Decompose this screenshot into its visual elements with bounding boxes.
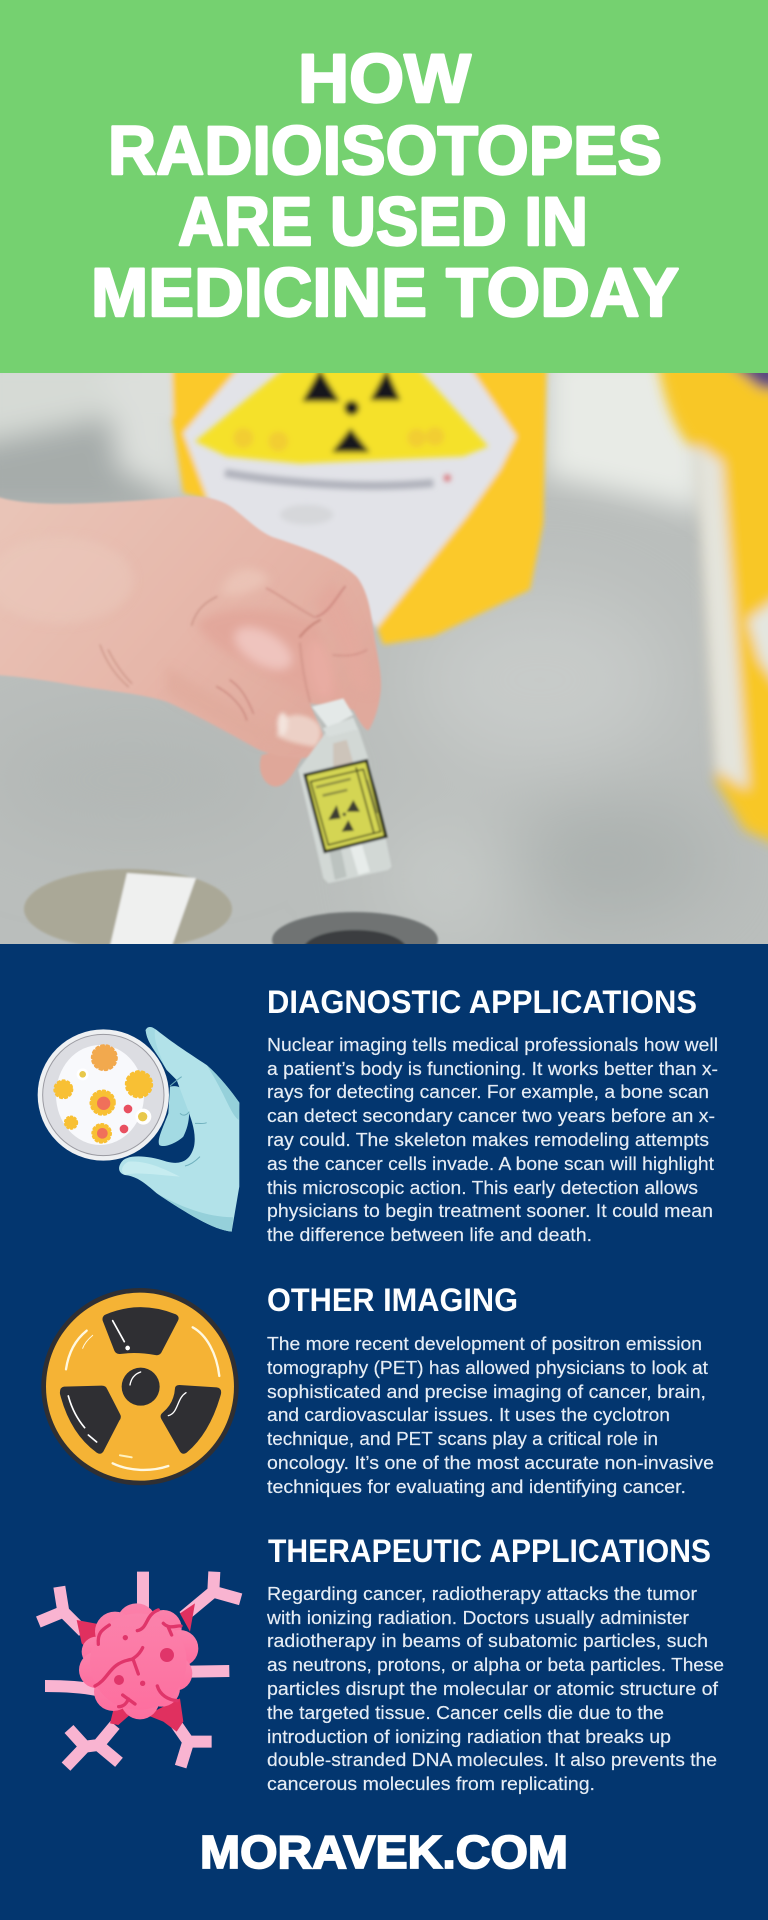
icon: gloved hand holding petri dish bbox=[38, 1027, 239, 1232]
heading: THERAPEUTIC APPLICATIONS bbox=[268, 1533, 711, 1569]
body text: as the cancer cells invade. A bone scan will highlight bbox=[267, 1153, 715, 1174]
footer website: MORAVEK.COM bbox=[200, 1826, 568, 1878]
right drum bbox=[657, 360, 768, 850]
photo: hand holding radioactive vial bbox=[0, 373, 768, 944]
glove bbox=[119, 1027, 239, 1232]
body text: oncology. It’s one of the most accurate non-invasive bbox=[267, 1452, 714, 1473]
body text: particles disrupt the molecular or atomic structure of bbox=[267, 1678, 719, 1699]
body text: radiotherapy in beams of subatomic particles, such bbox=[267, 1630, 708, 1651]
body text: technique, and PET scans play a critical role in bbox=[267, 1428, 658, 1449]
heading: OTHER IMAGING bbox=[267, 1282, 518, 1318]
blurred backdrop bbox=[0, 350, 705, 512]
body text: with ionizing radiation. Doctors usually administer bbox=[266, 1607, 689, 1628]
body text: The more recent development of positron emission bbox=[267, 1333, 702, 1354]
body text: and cardiovascular issues. It uses the cyclotron bbox=[267, 1404, 670, 1425]
body text: a patient’s body is functioning. It works better than x- bbox=[267, 1058, 718, 1079]
hand bbox=[0, 497, 381, 787]
icon: radiation symbol bbox=[41, 1288, 239, 1485]
body text: as neutrons, protons, or alpha or beta particles. These bbox=[267, 1654, 724, 1675]
body text bbox=[267, 1034, 718, 1245]
metal container bbox=[24, 869, 438, 970]
body text: tomography (PET) has allowed physicians to look at bbox=[267, 1357, 709, 1378]
title banner bbox=[0, 0, 768, 373]
body text: this microscopic action. This early detection allows bbox=[267, 1177, 698, 1198]
body text: rays for detecting cancer. For example, a bone scan bbox=[267, 1081, 709, 1102]
body text: techniques for evaluating and identifying cancer. bbox=[267, 1476, 686, 1497]
title: MEDICINE TODAY bbox=[91, 254, 679, 331]
body text: can detect secondary cancer two years before an x- bbox=[267, 1105, 715, 1126]
body text: the targeted tissue. Cancer cells die due to the bbox=[267, 1702, 664, 1723]
body text: Nuclear imaging tells medical professionals how well bbox=[267, 1034, 718, 1055]
title: HOW bbox=[298, 40, 472, 117]
body text: double-stranded DNA molecules. It also prevents the bbox=[267, 1749, 717, 1770]
body text bbox=[266, 1583, 724, 1794]
body text: Regarding cancer, radiotherapy attacks the tumor bbox=[267, 1583, 697, 1604]
icon: cancer cell bbox=[38, 1572, 241, 1767]
heading: DIAGNOSTIC APPLICATIONS bbox=[267, 984, 697, 1020]
title: ARE USED IN bbox=[178, 183, 588, 260]
section: diagnostic applications bbox=[267, 984, 718, 1245]
body text: ray could. The skeleton makes remodeling attempts bbox=[267, 1129, 709, 1150]
body text: sophisticated and precise imaging of cancer, brain, bbox=[267, 1381, 706, 1402]
section: therapeutic applications bbox=[266, 1533, 724, 1794]
body text bbox=[267, 1333, 714, 1497]
body text: the difference between life and death. bbox=[267, 1224, 592, 1245]
title: RADIOISOTOPES bbox=[108, 112, 662, 189]
body text: physicians to begin treatment sooner. It could mean bbox=[267, 1200, 713, 1221]
body text: introduction of ionizing radiation that breaks up bbox=[267, 1726, 671, 1747]
petri dish bbox=[38, 1029, 169, 1161]
title bbox=[91, 40, 679, 331]
yellow drum with hazard label bbox=[140, 363, 547, 645]
vial bbox=[298, 698, 392, 883]
body text: cancerous molecules from replicating. bbox=[267, 1773, 595, 1794]
section: other imaging bbox=[267, 1282, 714, 1497]
